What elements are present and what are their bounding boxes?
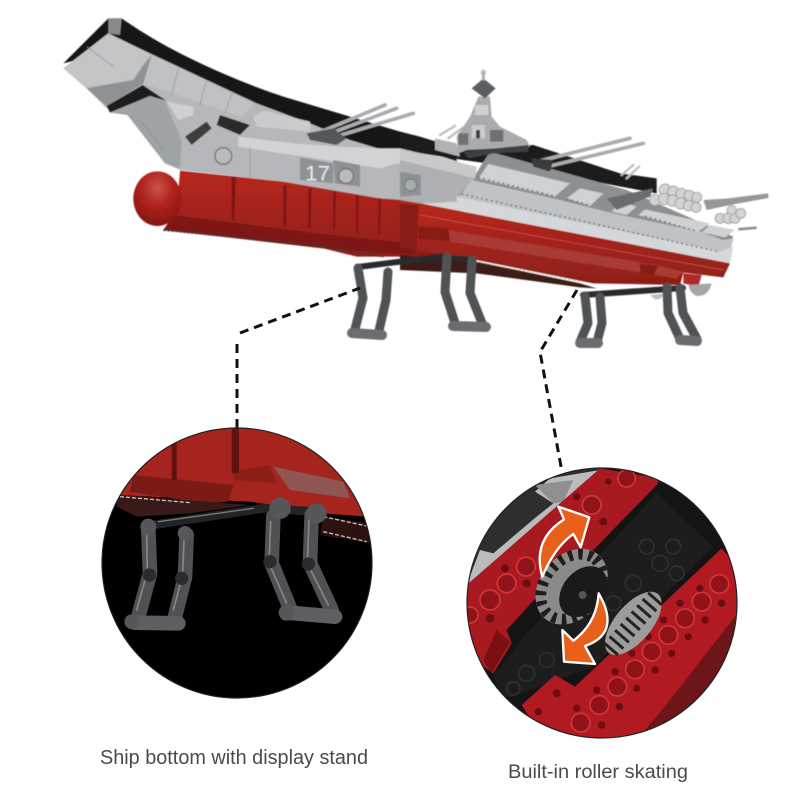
caption: ship bottom: Ship bottom with display stand [100, 747, 368, 769]
stud rings [462, 470, 729, 732]
hull side light band [457, 180, 733, 258]
rudder and propeller [683, 273, 702, 287]
panel lines [87, 47, 250, 177]
dark background [467, 468, 737, 738]
stacked drums [649, 184, 746, 224]
grey deck wedge [467, 470, 600, 585]
ship stern section [400, 70, 768, 299]
circle detail: rollers [460, 460, 740, 740]
dashed leader to left detail [237, 288, 360, 428]
deck rivet lines [462, 177, 718, 252]
dashed leader to right detail [540, 290, 577, 472]
leg highlights [137, 520, 328, 610]
tread strips [117, 495, 250, 517]
upper red beam [460, 468, 660, 673]
underside dark strip [400, 255, 597, 288]
dark deck corner [470, 468, 600, 574]
forward turret [313, 105, 413, 137]
hull number 17: 17 [305, 162, 330, 186]
stand feet [352, 326, 697, 343]
island tower [435, 70, 530, 158]
lower red beam [522, 548, 740, 740]
stand rails [358, 256, 683, 295]
circle outline left [102, 428, 372, 698]
red hull side [400, 202, 730, 285]
rear turret [607, 188, 768, 229]
porthole circles [215, 148, 417, 191]
red hull underside [121, 428, 363, 516]
upper deck [400, 132, 657, 193]
bulbous bow [133, 171, 181, 226]
stand legs [354, 257, 697, 342]
flight deck [63, 18, 463, 173]
black stud rings [507, 539, 684, 695]
front wheel [536, 548, 608, 624]
black background [102, 495, 372, 698]
deck panels [478, 164, 735, 237]
ship model [63, 18, 768, 343]
knee joints [143, 555, 315, 585]
small aa guns [440, 126, 639, 178]
stand feet [135, 613, 335, 623]
orange rotate arrows [540, 507, 608, 664]
display stands [352, 256, 697, 343]
stand frame [135, 508, 335, 623]
circle detail: display stand [102, 428, 372, 698]
circle outline right [467, 468, 737, 738]
mid turret [537, 138, 643, 166]
red hull side [163, 171, 463, 258]
dark bow strip [107, 85, 167, 113]
stand legs [138, 515, 332, 617]
dark red plate [646, 616, 736, 730]
caption: roller skating: Built-in roller skating [508, 762, 688, 783]
underside tread strip [163, 230, 383, 257]
black stud floor [493, 493, 713, 700]
grey bow hull [63, 33, 463, 203]
rear wheel [605, 592, 662, 656]
ship bow section [63, 18, 463, 258]
